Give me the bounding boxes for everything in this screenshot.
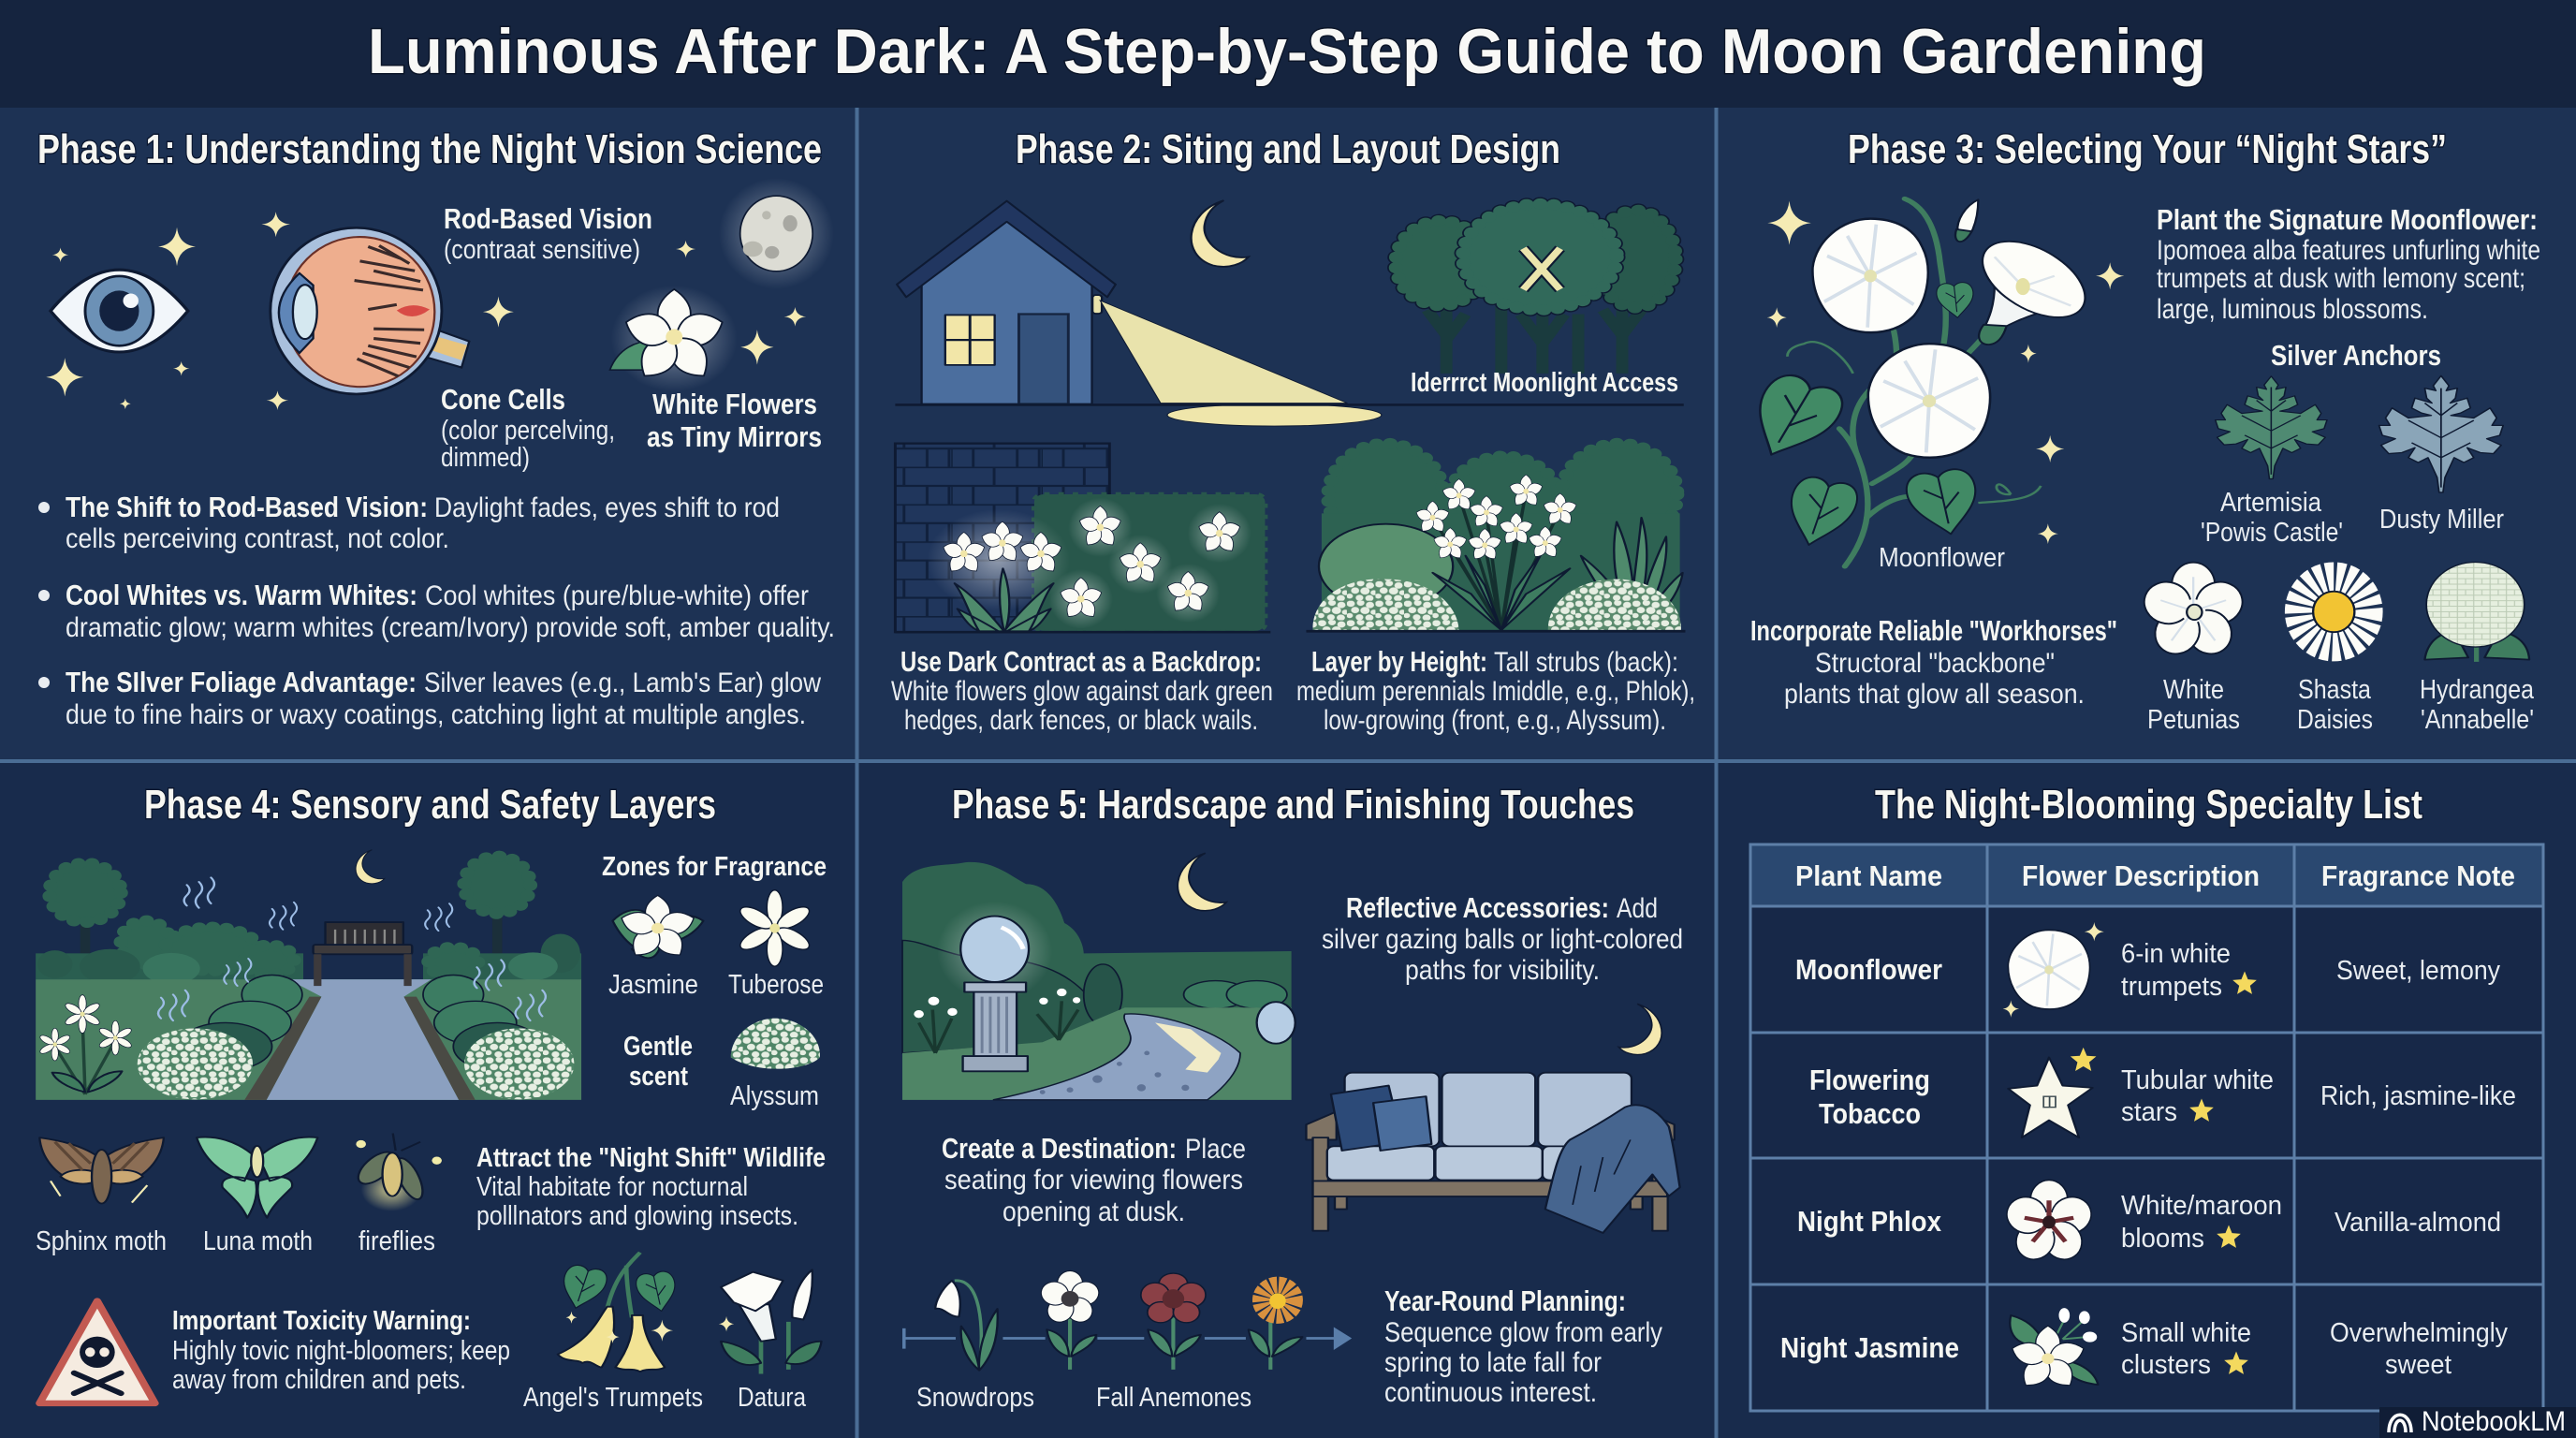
icon: snowdrop xyxy=(935,1281,998,1371)
label: white flowers as tiny mirrors: White Flowers xyxy=(652,388,817,420)
text: layer by height: Layer by Height: xyxy=(1311,645,1487,678)
bullet: silver foliage: due to fine hairs or waxy coatings, catching light at multiple angles. xyxy=(66,699,806,730)
text: layer by height xyxy=(1296,645,1695,736)
row: flowering tobacco xyxy=(1809,1064,2516,1130)
illustrations: phase 5 xyxy=(902,853,1680,1371)
table header row: Flower Description xyxy=(2022,859,2260,892)
icon: hydrangea xyxy=(2424,562,2529,662)
label: alyssum: Alyssum xyxy=(730,1081,819,1111)
text: dark contrast backdrop: White flowers glow against dark green xyxy=(891,676,1273,707)
panel: night-blooming specialty list xyxy=(1718,763,2576,1438)
icon: crescent moon right xyxy=(1618,1004,1661,1055)
label: hydrangea annabelle: 'Annabelle' xyxy=(2421,705,2534,735)
illustration: moonflower vine xyxy=(1735,198,2103,566)
icon: luna moth xyxy=(197,1137,317,1218)
row: night jasmine: Night Jasmine xyxy=(1780,1331,1959,1364)
illustrations: moonflower vine and plants xyxy=(1735,198,2529,662)
row: moonflower: trumpets xyxy=(2121,972,2222,1002)
icon: eyeball cross-section xyxy=(271,227,469,394)
row: night jasmine: clusters xyxy=(2121,1350,2211,1380)
label: artemisia: 'Powis Castle' xyxy=(2201,518,2343,548)
label: hydrangea annabelle: Hydrangea xyxy=(2420,675,2535,705)
label: snowdrops: Snowdrops xyxy=(916,1383,1034,1413)
heading: phase 5: Phase 5: Hardscape and Finishing Touches xyxy=(952,782,1634,828)
icon: crescent moon xyxy=(1192,200,1249,267)
text: year-round planning: continuous interest. xyxy=(1384,1377,1597,1408)
label: moonflower: Moonflower xyxy=(1879,543,2005,573)
panel: phase 5 hardscape xyxy=(858,763,1715,1438)
subheading: zones for fragrance: Zones for Fragrance xyxy=(602,852,827,882)
label: luna moth: Luna moth xyxy=(203,1226,313,1256)
text: reflective accessories: silver gazing balls or light-colored xyxy=(1322,924,1683,955)
label: indirect moonlight access: Iderrrct Moonlight Access xyxy=(1411,368,1678,398)
text: toxicity warning: Highly tovic night-bloomers; keep xyxy=(172,1336,510,1366)
row: night phlox: Night Phlox xyxy=(1797,1205,1942,1238)
icon: crescent moon xyxy=(1178,853,1226,911)
row: night phlox: Vanilla-almond xyxy=(2334,1208,2501,1238)
icon: night jasmine xyxy=(2009,1308,2098,1391)
table xyxy=(1750,844,2543,1411)
illustration: gazing ball garden path xyxy=(902,862,1295,1100)
text: night shift wildlife: Vital habitate for nocturnal xyxy=(476,1172,748,1202)
bullet: silver foliage: The SIlver Foliage Advantage: xyxy=(66,666,417,698)
icon: angel's trumpets xyxy=(555,1253,681,1372)
text: workhorses: plants that glow all season. xyxy=(1784,679,2085,710)
text: toxicity warning: away from children and pets. xyxy=(172,1365,466,1395)
label: cone cells: (color percelving, xyxy=(441,416,615,446)
text: reflective accessories: Add xyxy=(1617,893,1658,924)
text: year-round planning: Sequence glow from early xyxy=(1384,1317,1662,1348)
icon: human eye xyxy=(51,270,188,352)
icon: phlox xyxy=(2002,1180,2096,1267)
row: night jasmine: Small white xyxy=(2121,1318,2251,1348)
icon: alyssum xyxy=(731,1019,820,1069)
icon: jasmine xyxy=(613,895,703,961)
text: create a destination: Create a Destination: xyxy=(942,1132,1177,1165)
label: rod-based vision: Rod-Based Vision xyxy=(444,202,652,235)
row: night jasmine: Overwhelmingly xyxy=(2330,1318,2508,1348)
label: datura: Datura xyxy=(738,1383,807,1413)
label: sphinx moth: Sphinx moth xyxy=(36,1226,167,1256)
text: dark contrast backdrop xyxy=(891,645,1273,736)
text: night shift wildlife: Attract the "Night Shift" Wildlife xyxy=(476,1143,826,1173)
text: layer by height: medium perennials Imiddle, e.g., Phlok), xyxy=(1296,676,1695,707)
text: create a destination: opening at dusk. xyxy=(1003,1196,1185,1227)
panel: phase 3 night stars xyxy=(1718,108,2576,759)
label: dusty miller: Dusty Miller xyxy=(2379,505,2504,535)
icon: white petunia xyxy=(2139,563,2248,662)
row icons xyxy=(2002,922,2104,1391)
label: shasta daisies: Daisies xyxy=(2297,705,2373,735)
text: signature moonflower: large, luminous blossoms. xyxy=(2157,294,2428,325)
text: dark contrast backdrop: hedges, dark fences, or black wails. xyxy=(904,705,1258,736)
icon: tobacco star flower xyxy=(2008,1048,2096,1137)
title banner xyxy=(0,0,2576,108)
heading: phase 3: Phase 3: Selecting Your “Night Stars” xyxy=(1848,126,2447,172)
panel: phase 1 night vision science xyxy=(0,108,856,759)
row: night phlox: White/maroon xyxy=(2121,1191,2282,1221)
label: shasta daisies: Shasta xyxy=(2298,675,2372,705)
label: white petunias xyxy=(2147,675,2240,735)
text: workhorses: Structoral "backbone" xyxy=(1815,648,2055,679)
icon: white anemone xyxy=(1038,1270,1102,1370)
row: night phlox: blooms xyxy=(2121,1224,2204,1254)
illustration: eye, eyeball, moon and flower with sparkles xyxy=(46,178,834,410)
row: flowering tobacco: Tubular white xyxy=(2121,1065,2274,1095)
bullet: rod-based vision: The Shift to Rod-Based Vision: xyxy=(66,491,428,523)
label: jasmine: Jasmine xyxy=(608,970,698,1000)
text: year-round planning: Year-Round Planning: xyxy=(1384,1284,1626,1317)
illustration: fragrant garden with bench xyxy=(36,850,581,1100)
row: moonflower: Sweet, lemony xyxy=(2336,956,2500,986)
label: gentle scent: scent xyxy=(629,1062,688,1092)
illustration: outdoor sofa xyxy=(1306,1073,1680,1233)
heading: phase 2: Phase 2: Siting and Layout Design xyxy=(1016,126,1560,172)
text: create a destination: seating for viewing flowers xyxy=(944,1165,1243,1196)
label: rod-based vision: (contraat sensitive) xyxy=(444,235,640,265)
text: night shift wildlife: polllnators and glowing insects. xyxy=(476,1201,798,1231)
icon: moonflower xyxy=(2003,922,2104,1018)
icon: orange daisy xyxy=(1249,1284,1302,1370)
icon: sphinx moth xyxy=(39,1137,164,1204)
illustration: brick wall and hedge with white flowers xyxy=(895,444,1270,632)
row: night jasmine xyxy=(1780,1318,2508,1380)
illustration: house with security light xyxy=(895,201,1684,426)
label: angel's trumpets: Angel's Trumpets xyxy=(523,1383,703,1413)
bullet: cool vs warm whites: dramatic glow; warm whites (cream/Ivory) provide soft, amber quality. xyxy=(66,612,835,643)
label: artemisia xyxy=(2201,488,2343,548)
label: tuberose: Tuberose xyxy=(728,970,824,1000)
row: flowering tobacco: stars xyxy=(2121,1097,2177,1127)
illustration: trees blocking moonlight xyxy=(1396,204,1676,374)
bullet: silver foliage: Silver leaves (e.g., Lamb's Ear) glow xyxy=(424,668,821,698)
label: fall anemones: Fall Anemones xyxy=(1096,1383,1251,1413)
illustration: planting layered by height xyxy=(1306,444,1685,631)
label: gentle scent xyxy=(623,1032,693,1092)
heading: specialty list: The Night-Blooming Specialty List xyxy=(1875,782,2422,828)
text: create a destination: Place xyxy=(1185,1134,1246,1165)
icon: firefly xyxy=(352,1133,442,1211)
icon: dusty miller xyxy=(2379,375,2503,492)
illustration: year-round timeline of flowers xyxy=(904,1270,1352,1371)
label: white flowers as tiny mirrors xyxy=(647,388,822,453)
label: fireflies: fireflies xyxy=(359,1226,435,1256)
icon: white flower xyxy=(610,286,738,391)
icon: shasta daisy xyxy=(2299,577,2368,647)
label: shasta daisies xyxy=(2297,675,2373,735)
row: moonflower: Moonflower xyxy=(1795,953,1942,986)
bullet: rod-based vision: Daylight fades, eyes shift to rod xyxy=(434,492,780,523)
icon: gazing ball on pedestal xyxy=(937,902,1052,1071)
label: white petunias: White xyxy=(2163,675,2224,705)
icon: full moon xyxy=(719,178,834,289)
text: workhorses: Incorporate Reliable "Workhorses" xyxy=(1750,614,2117,647)
sparkles xyxy=(1767,201,2124,544)
text: reflective accessories: Reflective Accessories: xyxy=(1346,891,1609,924)
table header row: Fragrance Note xyxy=(2321,859,2515,892)
label: cone cells: dimmed) xyxy=(441,443,530,473)
row: flowering tobacco: Flowering xyxy=(1809,1064,1930,1096)
label: artemisia: Artemisia xyxy=(2220,488,2322,518)
bullet: cool vs warm whites xyxy=(38,579,835,643)
text: year-round planning: spring to late fall for xyxy=(1384,1347,1602,1378)
bullet: cool vs warm whites: Cool Whites vs. Warm Whites: xyxy=(66,579,417,611)
row: flowering tobacco: Rich, jasmine-like xyxy=(2320,1081,2516,1111)
icon: tuberose xyxy=(737,890,812,966)
icon: maroon flower xyxy=(1141,1273,1206,1370)
bullet: cool vs warm whites: Cool whites (pure/blue-white) offer xyxy=(425,580,809,611)
text: layer by height: low-growing (front, e.g., Alyssum). xyxy=(1324,705,1666,736)
illustrations: phase 4 xyxy=(36,850,822,1403)
heading: phase 4: Phase 4: Sensory and Safety Layers xyxy=(144,782,716,828)
title: Luminous After Dark: A Step-by-Step Guide to Moon Gardening xyxy=(368,16,2206,87)
row: flowering tobacco: Tobacco xyxy=(1819,1097,1921,1130)
bullet: rod-based vision: cells perceiving contrast, not color. xyxy=(66,523,449,554)
text: night shift wildlife xyxy=(476,1143,826,1231)
text: reflective accessories: paths for visibility. xyxy=(1405,955,1600,986)
label: gentle scent: Gentle xyxy=(623,1032,693,1062)
label: cone cells xyxy=(441,383,615,473)
row: moonflower xyxy=(1795,939,2500,1002)
label: white petunias: Petunias xyxy=(2147,705,2240,735)
heading: phase 1: Phase 1: Understanding the Night Vision Science xyxy=(37,126,822,172)
icon: datura xyxy=(719,1269,822,1373)
panel: phase 4 sensory and safety xyxy=(0,763,856,1438)
text: create a destination xyxy=(942,1132,1246,1227)
text: workhorses xyxy=(1750,614,2117,710)
text: dark contrast backdrop: Use Dark Contract as a Backdrop: xyxy=(900,645,1262,678)
label: rod-based vision xyxy=(444,202,652,265)
text: year-round planning xyxy=(1384,1284,1662,1408)
text: signature moonflower xyxy=(2157,203,2540,325)
text: layer by height: Tall strubs (back): xyxy=(1494,647,1678,678)
row: night phlox xyxy=(1797,1191,2501,1254)
panel: phase 2 siting and layout xyxy=(858,108,1715,759)
bullet: rod-based vision xyxy=(38,491,780,554)
icon: artemisia xyxy=(2216,376,2327,479)
row: night jasmine: sweet xyxy=(2385,1350,2452,1380)
table header row: Plant Name xyxy=(1795,859,1942,892)
illustrations: house, trees, hedge, layered bed xyxy=(895,200,1685,632)
bullet: silver foliage xyxy=(38,666,821,730)
icon: bench xyxy=(314,922,412,986)
table header row xyxy=(1795,859,2515,892)
text: toxicity warning xyxy=(172,1306,510,1395)
icon: toxicity warning sign xyxy=(39,1301,155,1403)
label: white flowers as tiny mirrors: as Tiny Mirrors xyxy=(647,420,822,453)
label: cone cells: Cone Cells xyxy=(441,383,565,416)
row: moonflower: 6-in white xyxy=(2121,939,2231,969)
subheading: silver anchors: Silver Anchors xyxy=(2271,339,2441,372)
text: toxicity warning: Important Toxicity Warning: xyxy=(172,1306,471,1336)
label: hydrangea annabelle xyxy=(2420,675,2535,735)
text: reflective accessories xyxy=(1322,891,1683,986)
sparkles xyxy=(46,212,806,410)
